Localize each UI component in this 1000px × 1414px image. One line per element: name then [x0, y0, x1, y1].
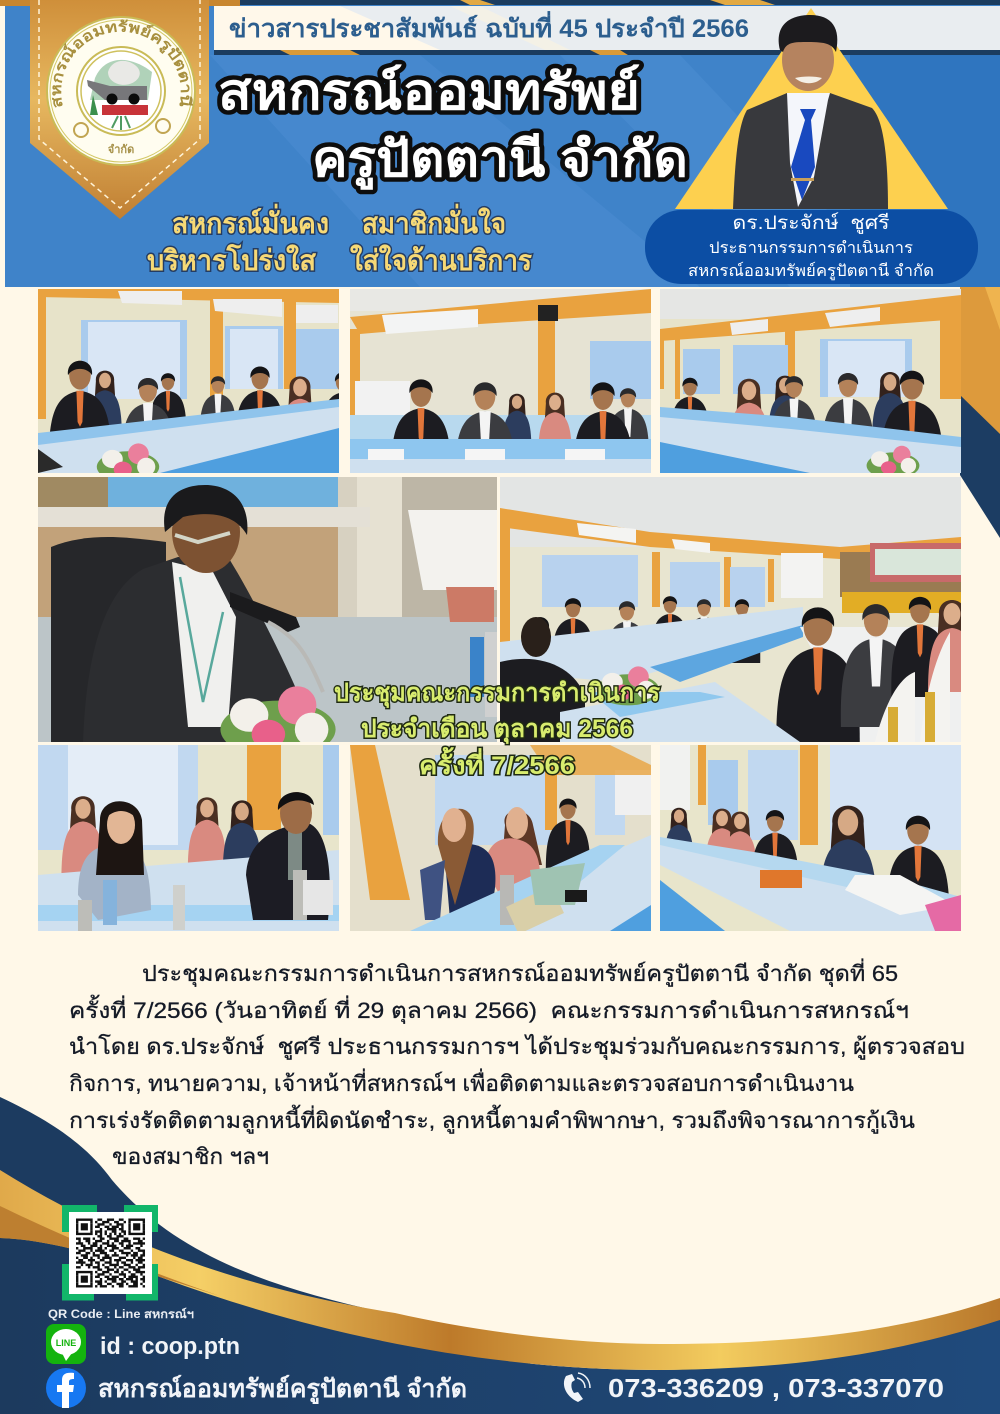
meeting caption: ประจำเดือน ตุลาคม 2566	[361, 715, 633, 745]
slogan: ใส่ใจด้านบริการ	[350, 244, 532, 276]
meeting caption	[334, 679, 661, 780]
president name plate: ประธานกรรมการดำเนินการ	[709, 240, 913, 257]
body paragraph	[69, 958, 965, 1169]
president name plate	[645, 210, 978, 284]
icon: phone	[564, 1373, 590, 1402]
header banner	[0, 0, 1000, 287]
gold swoosh	[0, 1170, 1000, 1370]
icon: Facebook	[46, 1368, 86, 1408]
title: สหกรณ์ออมทรัพย์	[218, 64, 640, 120]
meeting caption: ประชุมคณะกรรมการดำเนินการ	[334, 679, 661, 709]
photo: committee reading documents	[660, 745, 961, 931]
QR label: QR Code : Line สหกรณ์ฯ	[48, 1307, 194, 1321]
photo: committee women smiling	[350, 745, 651, 931]
body paragraph: นำโดย ดร.ประจักษ์ ชูศรี ประธานกรรมการฯ ได้ประชุมร่วมกับคณะกรรมการ, ผู้ตรวจสอบ	[69, 1034, 965, 1060]
logo: สหกรณ์ออมทรัพย์ครูปัตตานี	[52, 19, 193, 108]
meeting caption: ครั้งที่ 7/2566	[419, 746, 575, 780]
slogan: สมาชิกมั่นใจ	[362, 203, 506, 239]
photo: president reading at microphone	[38, 477, 497, 742]
body paragraph: ของสมาชิก ฯลฯ	[112, 1144, 269, 1169]
Facebook page name: สหกรณ์ออมทรัพย์ครูปัตตานี จำกัด	[98, 1374, 467, 1405]
body paragraph: กิจการ, ทนายความ, เจ้าหน้าที่สหกรณ์ฯ เพื่อติดตามและตรวจสอบการดำเนินงาน	[69, 1068, 854, 1096]
slogan: สหกรณ์มั่นคง	[172, 203, 329, 239]
phone numbers: 073-336209 , 073-337070	[608, 1373, 944, 1403]
body paragraph: ประชุมคณะกรรมการดำเนินการสหกรณ์ออมทรัพย์ครูปัตตานี จำกัด ชุดที่ 65	[142, 958, 898, 987]
title: ครูปัตตานี จำกัด	[312, 131, 688, 190]
photo: meeting room centre row	[350, 289, 651, 473]
newsletter issue line: ข่าวสารประชาสัมพันธ์ ฉบับที่ 45 ประจำปี 2566	[229, 11, 749, 43]
slogan	[147, 203, 532, 276]
photo: meeting room left row	[38, 289, 339, 473]
body paragraph: ครั้งที่ 7/2566 (วันอาทิตย์ ที่ 29 ตุลาคม 2566) คณะกรรมการดำเนินการสหกรณ์ฯ	[69, 995, 909, 1024]
president name plate: ดร.ประจักษ์ ชูศรี	[732, 212, 890, 234]
ribbon with logo	[30, 0, 209, 219]
QR code	[66, 1208, 154, 1297]
president portrait	[675, 8, 948, 209]
title	[218, 64, 688, 190]
logo	[46, 16, 196, 166]
LINE id: id : coop.ptn	[100, 1333, 240, 1360]
slogan: บริหารโปร่งใส	[147, 243, 317, 276]
icon: LINE: LINE	[56, 1338, 76, 1348]
photo: meeting room right row	[660, 289, 961, 473]
logo: จำกัด	[108, 143, 134, 156]
president name plate: สหกรณ์ออมทรัพย์ครูปัตตานี จำกัด	[688, 261, 934, 281]
photo: committee women and man	[38, 745, 339, 931]
photo: wide view of meeting room	[500, 477, 961, 742]
icon: LINE	[46, 1324, 86, 1364]
right side decoration	[960, 287, 1000, 538]
body paragraph: การเร่งรัดติดตามลูกหนี้ที่ผิดนัดชำระ, ลูกหนี้ตามคำพิพากษา, รวมถึงพิจารณาการกู้เงิน	[69, 1105, 915, 1134]
footer background shape	[0, 1097, 1000, 1414]
